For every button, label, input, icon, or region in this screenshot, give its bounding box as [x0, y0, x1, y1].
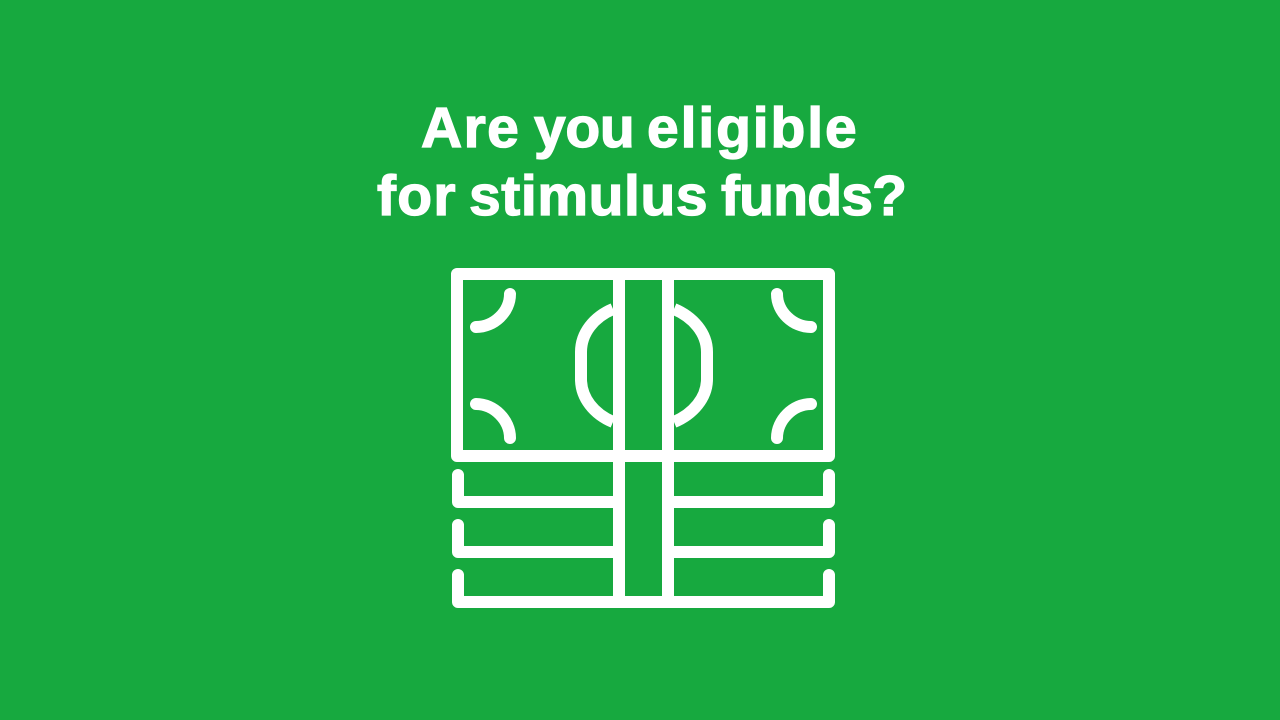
title: you [534, 96, 634, 160]
title: for [377, 164, 457, 228]
stacked note edges right [668, 475, 829, 602]
stacked note edges left [458, 475, 619, 602]
title: Are [421, 96, 520, 160]
icon: stack of money [457, 274, 829, 602]
top banknote outline [457, 274, 829, 456]
band bottom [619, 596, 668, 608]
corner marks [476, 294, 811, 438]
paper band [619, 274, 668, 602]
title: stimulus [469, 164, 708, 228]
center oval [581, 309, 707, 422]
title: funds? [721, 164, 906, 228]
title: eligible [647, 96, 859, 160]
title [377, 96, 906, 228]
